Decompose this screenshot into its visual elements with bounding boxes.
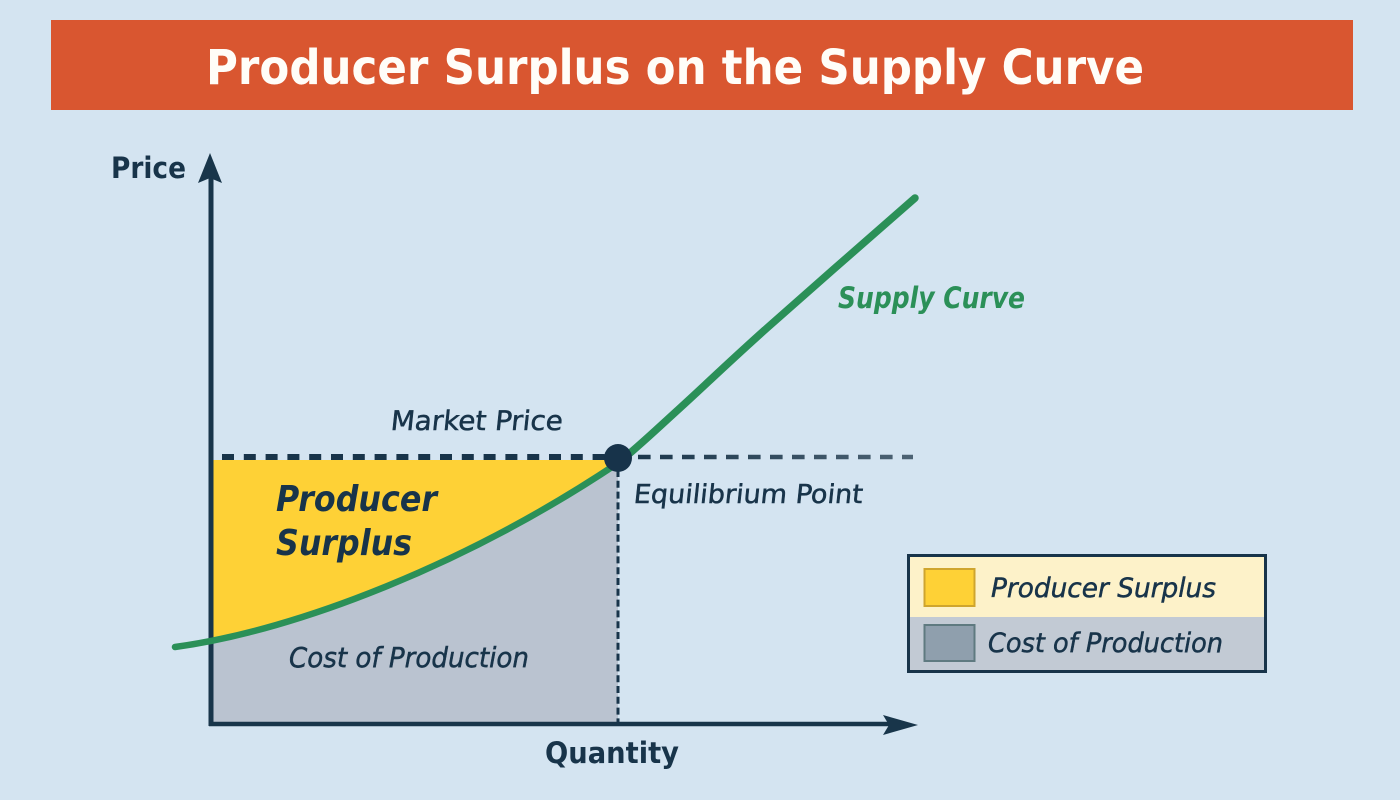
- supply curve label: Supply Curve: [838, 281, 1025, 315]
- producer surplus label: Surplus: [276, 523, 412, 564]
- producer surplus area: [214, 460, 607, 638]
- title banner: [51, 20, 1353, 110]
- legend label: producer surplus: Producer Surplus: [991, 573, 1216, 604]
- equilibrium point label: Equilibrium Point: [632, 480, 864, 510]
- supply curve: [175, 198, 915, 647]
- legend swatch: cost of production: [924, 625, 974, 661]
- equilibrium point: [604, 444, 632, 472]
- legend swatch: producer surplus: [924, 569, 974, 606]
- producer surplus label: [276, 479, 439, 564]
- cost of production area: [214, 470, 618, 722]
- legend label: cost of production: Cost of Production: [988, 628, 1223, 659]
- title banner: Producer Surplus on the Supply Curve: [206, 40, 1144, 96]
- y axis label: Price: [111, 151, 186, 185]
- x axis with arrow: [209, 715, 918, 735]
- y axis with arrow: [198, 153, 222, 726]
- equilibrium drop line: [616, 470, 620, 723]
- legend: [908, 556, 1266, 672]
- cost of production label: Cost of Production: [289, 641, 529, 674]
- x axis label: Quantity: [545, 736, 679, 770]
- producer surplus label: Producer: [276, 479, 439, 520]
- market price dashed line: [222, 454, 913, 460]
- market price label: Market Price: [389, 406, 565, 437]
